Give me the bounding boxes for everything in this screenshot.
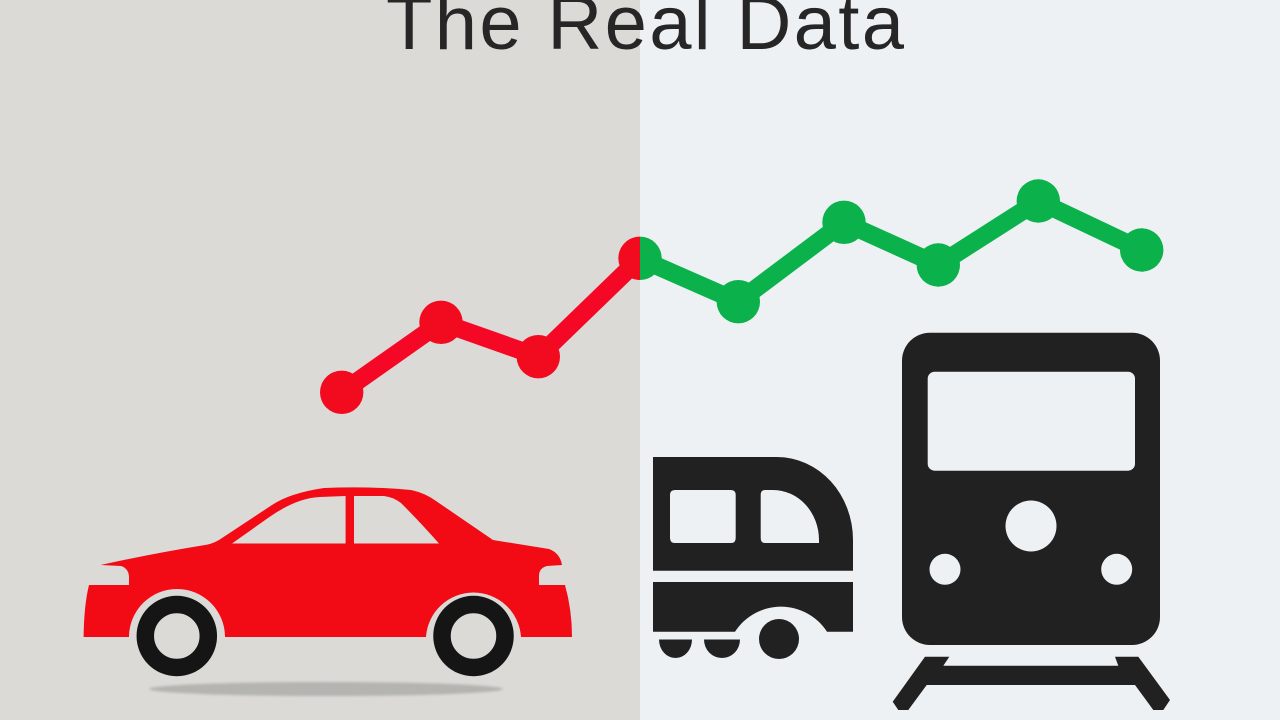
large wheel bbox=[759, 619, 799, 659]
train upper body with windows bbox=[653, 457, 853, 571]
train windscreen bbox=[928, 372, 1135, 471]
rail track bbox=[893, 657, 1170, 710]
icon: side view train bbox=[653, 457, 853, 659]
small wheel 1 bbox=[659, 640, 692, 658]
panel: right train side background bbox=[640, 0, 1280, 720]
center headlight bbox=[1006, 500, 1056, 552]
train front body bbox=[902, 333, 1160, 645]
car shadow bbox=[149, 682, 503, 696]
car body bbox=[84, 487, 572, 637]
train lower body bbox=[653, 582, 853, 632]
line chart: red to green trend bbox=[320, 179, 1163, 414]
rear wheel bbox=[442, 604, 505, 668]
small wheel 2 bbox=[704, 640, 740, 658]
front wheel bbox=[145, 604, 208, 668]
red trend line bbox=[320, 237, 650, 414]
icon: red car bbox=[84, 487, 572, 696]
panel: left car side background bbox=[0, 0, 640, 720]
green trend line bbox=[625, 179, 1163, 323]
icon: front view train bbox=[893, 333, 1170, 710]
left light bbox=[930, 554, 960, 585]
right light bbox=[1101, 554, 1132, 585]
